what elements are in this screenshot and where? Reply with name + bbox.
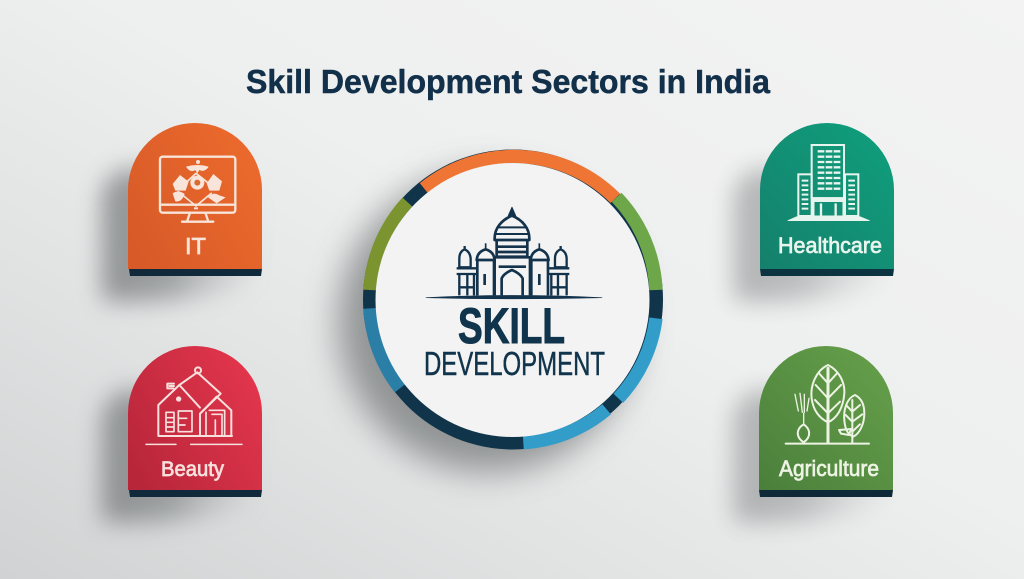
icon: domed monument: [426, 207, 602, 299]
panel: IT: [128, 123, 262, 276]
icon: plants and trees: [786, 365, 869, 444]
panel: Agriculture: [759, 346, 893, 497]
ring segments: [370, 156, 656, 443]
label: Healthcare: Healthcare: [778, 233, 882, 258]
label: Beauty: Beauty: [161, 458, 224, 481]
label: IT: IT: [185, 233, 206, 259]
icon: computer monitor: [160, 157, 235, 222]
icon: house: [146, 367, 242, 444]
panel: Healthcare: [760, 123, 894, 276]
label: Agriculture: Agriculture: [779, 456, 879, 481]
heading: SKILL: SKILL: [458, 298, 565, 354]
icon: hospital buildings: [788, 145, 870, 221]
central circle badge: [363, 150, 663, 450]
panel: Beauty: [128, 346, 262, 497]
heading: DEVELOPMENT: DEVELOPMENT: [424, 345, 605, 382]
title: Skill Development Sectors in India: [246, 63, 771, 100]
